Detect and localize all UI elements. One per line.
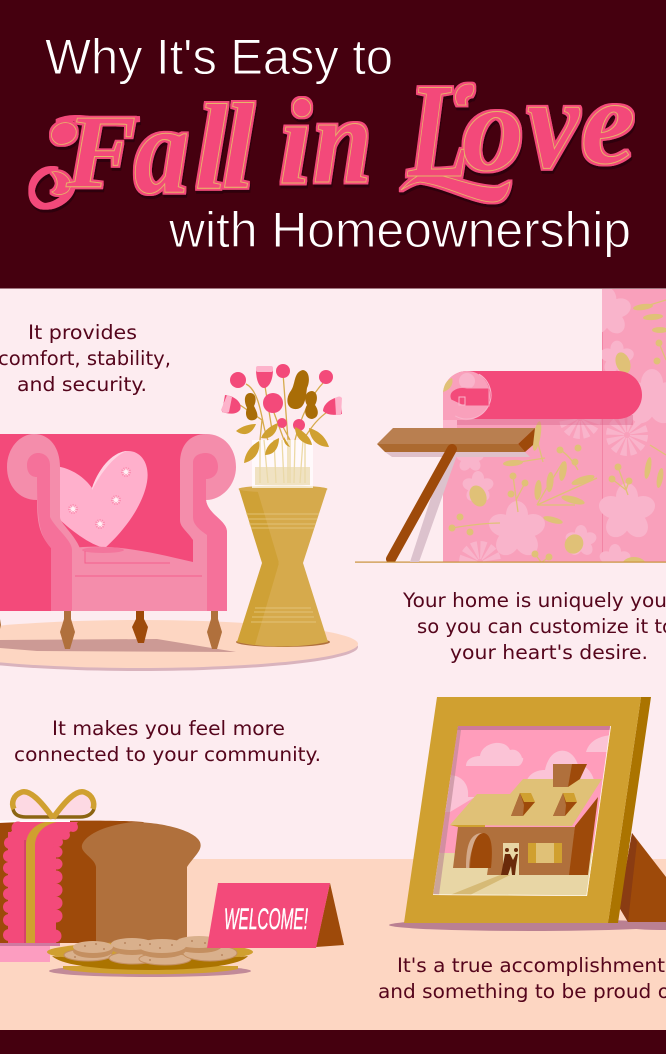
title line: with Homeownership: with Homeownership <box>168 202 631 258</box>
title script: Fall in Love: a <box>134 82 189 220</box>
caption: customize: your heart's desire. <box>450 641 648 664</box>
frame stand <box>619 833 666 922</box>
illustration: gift loaf of bread <box>0 792 201 962</box>
title line: Why It's Easy to: Why It's Easy to <box>45 29 393 85</box>
loaf slice <box>82 822 201 943</box>
footer band <box>0 1030 666 1054</box>
title script: Fall in Love: o <box>462 60 524 197</box>
title script: Fall in Love <box>32 51 635 220</box>
header band <box>0 0 666 288</box>
framed house picture <box>425 726 615 898</box>
title script: Fall in Love: F <box>65 93 136 210</box>
illustration: welcome card <box>207 883 344 948</box>
caption: community: It makes you feel more <box>52 717 285 740</box>
chair legs <box>0 611 222 649</box>
title script: Fall in Love: e <box>581 55 635 190</box>
caption: comfort: It provides <box>28 321 137 344</box>
title script: Fall in Love: i <box>279 74 311 210</box>
illustration: picture frame <box>389 697 666 931</box>
caption: customize: so you can customize it to <box>417 615 666 638</box>
caption: comfort: comfort, stability, <box>0 347 171 370</box>
caption: comfort: and security. <box>17 373 147 396</box>
background: floor <box>0 859 666 1030</box>
ribbon <box>3 822 78 943</box>
caption: customize <box>402 589 666 664</box>
illustration: bench shelf <box>377 428 535 568</box>
illustration: side table <box>236 486 330 647</box>
title script: Fall in Love: v <box>527 51 580 195</box>
title script: Fall in Love: L <box>407 56 470 205</box>
seat <box>72 530 207 611</box>
caption: community: connected to your community. <box>14 743 321 766</box>
title script: Fall in Love: l <box>195 79 227 215</box>
title script: Fall in Love: n <box>313 71 372 209</box>
left arm <box>7 434 83 611</box>
title script: Fall in Love: l <box>222 78 254 214</box>
illustration: plate of cookies <box>47 936 253 977</box>
welcome text: WELCOME! <box>224 903 308 936</box>
floor line <box>355 562 666 563</box>
illustration: wallpaper <box>355 287 666 576</box>
background: room wall <box>0 289 666 859</box>
illustration: flower vase <box>221 364 342 488</box>
caption: accomplishment: It's a true accomplishment <box>397 954 665 977</box>
illustration: rug <box>0 620 358 671</box>
caption: community <box>14 717 321 766</box>
heart pillow <box>55 451 148 548</box>
right arm <box>180 434 236 611</box>
illustration: wallpaper roll <box>434 362 642 428</box>
illustration: armchair <box>0 434 236 649</box>
caption: accomplishment: and something to be proud of. <box>378 980 666 1003</box>
bow <box>13 792 94 818</box>
caption: comfort <box>0 321 171 396</box>
caption: accomplishment <box>378 954 666 1003</box>
